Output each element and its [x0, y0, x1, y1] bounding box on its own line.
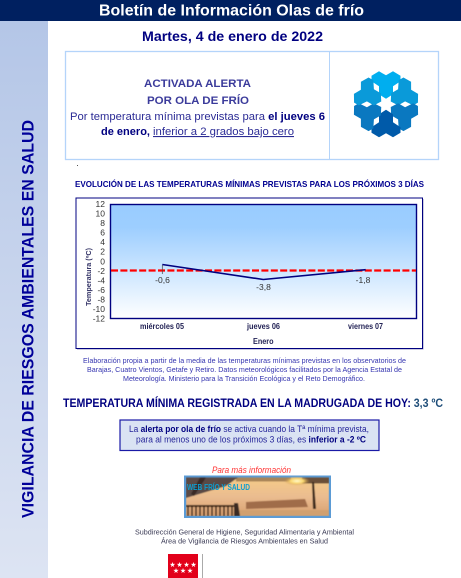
data labels: -3,8 [256, 282, 271, 292]
definition text: La alerta por ola de frío se activa cuando la Tª mínima prevista, [129, 424, 369, 434]
credits: Subdirección General de Higiene, Seguridad Alimentaria y Ambiental [135, 528, 354, 536]
y axis labels [93, 199, 105, 324]
logo: Comunidad de Madrid: ★ [176, 561, 183, 569]
header bar [0, 0, 461, 21]
y axis labels: 12 [96, 199, 105, 209]
y axis labels: 10 [96, 208, 105, 218]
logo: Comunidad de Madrid: ★ [180, 567, 186, 575]
sidebar vertical title: VIGILANCIA DE RIESGOS AMBIENTALES EN SALUD [18, 120, 38, 518]
y axis labels: -10 [93, 304, 105, 314]
logo: Comunidad de Madrid: ★ [173, 567, 179, 575]
y axis title: Temperatura (ºC) [86, 248, 93, 306]
date heading: Martes, 4 de enero de 2022 [142, 28, 323, 44]
source note: Meteorología. Ministerio para la Transición Ecológica y el Reto Demográfico. [123, 374, 365, 383]
credits: Área de Vigilancia de Riesgos Ambientales en Salud [161, 536, 328, 546]
threshold line [111, 269, 416, 272]
y axis labels: 2 [100, 246, 105, 256]
y axis labels: -8 [97, 294, 105, 304]
y axis labels: -12 [93, 314, 105, 324]
y axis labels: 6 [100, 228, 105, 238]
temperature line [162, 264, 366, 280]
x axis title: Enero [253, 337, 274, 346]
sidebar [0, 21, 48, 578]
alert description: Por temperatura mínima previstas para el jueves 6 [70, 111, 325, 123]
alert description: inferior a 2 grados bajo cero [153, 126, 294, 138]
x axis labels: jueves 06 [246, 322, 281, 331]
x axis labels: miércoles 05 [140, 322, 184, 331]
definition text [129, 424, 369, 444]
alert description [70, 111, 325, 138]
y axis labels: 0 [100, 256, 105, 266]
alert heading [144, 78, 251, 107]
logo: Comunidad de Madrid: ★ [187, 567, 193, 575]
source note: Barajas, Cuatro Vientos, Getafe y Retiro. Datos meteorológicos facilitados por la Agencia Estatal de [87, 365, 402, 374]
chart title: EVOLUCIÓN DE LAS TEMPERATURAS MÍNIMAS PREVISTAS PARA LOS PRÓXIMOS 3 DÍAS [75, 178, 424, 189]
y axis labels: -6 [97, 285, 105, 295]
y axis labels: -4 [97, 276, 105, 286]
definition text: para al menos uno de los próximos 3 días, es inferior a -2 ºC [136, 434, 366, 444]
photo link: winter lake at sunset [184, 476, 331, 518]
alert heading: ACTIVADA ALERTA [144, 78, 251, 90]
line chart [76, 198, 424, 350]
y axis labels: -2 [97, 266, 105, 276]
data labels: -0,6 [155, 275, 170, 285]
logo: Comunidad de Madrid [168, 554, 203, 578]
x axis labels [140, 322, 383, 346]
y axis labels: 4 [100, 237, 105, 247]
alert panel [66, 52, 438, 160]
alert description: de enero, [101, 126, 150, 138]
photo caption: WEB FRÍO Y SALUD [187, 483, 250, 492]
data labels [155, 275, 371, 292]
y axis labels: 8 [100, 218, 105, 228]
data labels: -1,8 [356, 275, 371, 285]
x axis labels: viernes 07 [348, 322, 383, 331]
alert heading: POR OLA DE FRÍO [147, 94, 249, 107]
header title: Boletín de Información Olas de frío [99, 2, 364, 20]
logo: Comunidad de Madrid: ★ [169, 561, 176, 569]
minimum temperature heading: TEMPERATURA MÍNIMA REGISTRADA EN LA MADRUGADA DE HOY: 3,3 ºC [63, 395, 443, 410]
logo: Comunidad de Madrid: ★ [183, 561, 190, 569]
source note: Elaboración propia a partir de la media de las temperaturas mínimas previstas en los observatorios de [83, 356, 406, 365]
definition box [120, 420, 379, 450]
source note [83, 356, 406, 383]
more info label: Para más información [212, 465, 291, 475]
plot area [110, 204, 416, 318]
logo: Comunidad de Madrid: ★ [190, 561, 197, 569]
icon: snowflake [350, 71, 422, 137]
credits [135, 528, 354, 546]
